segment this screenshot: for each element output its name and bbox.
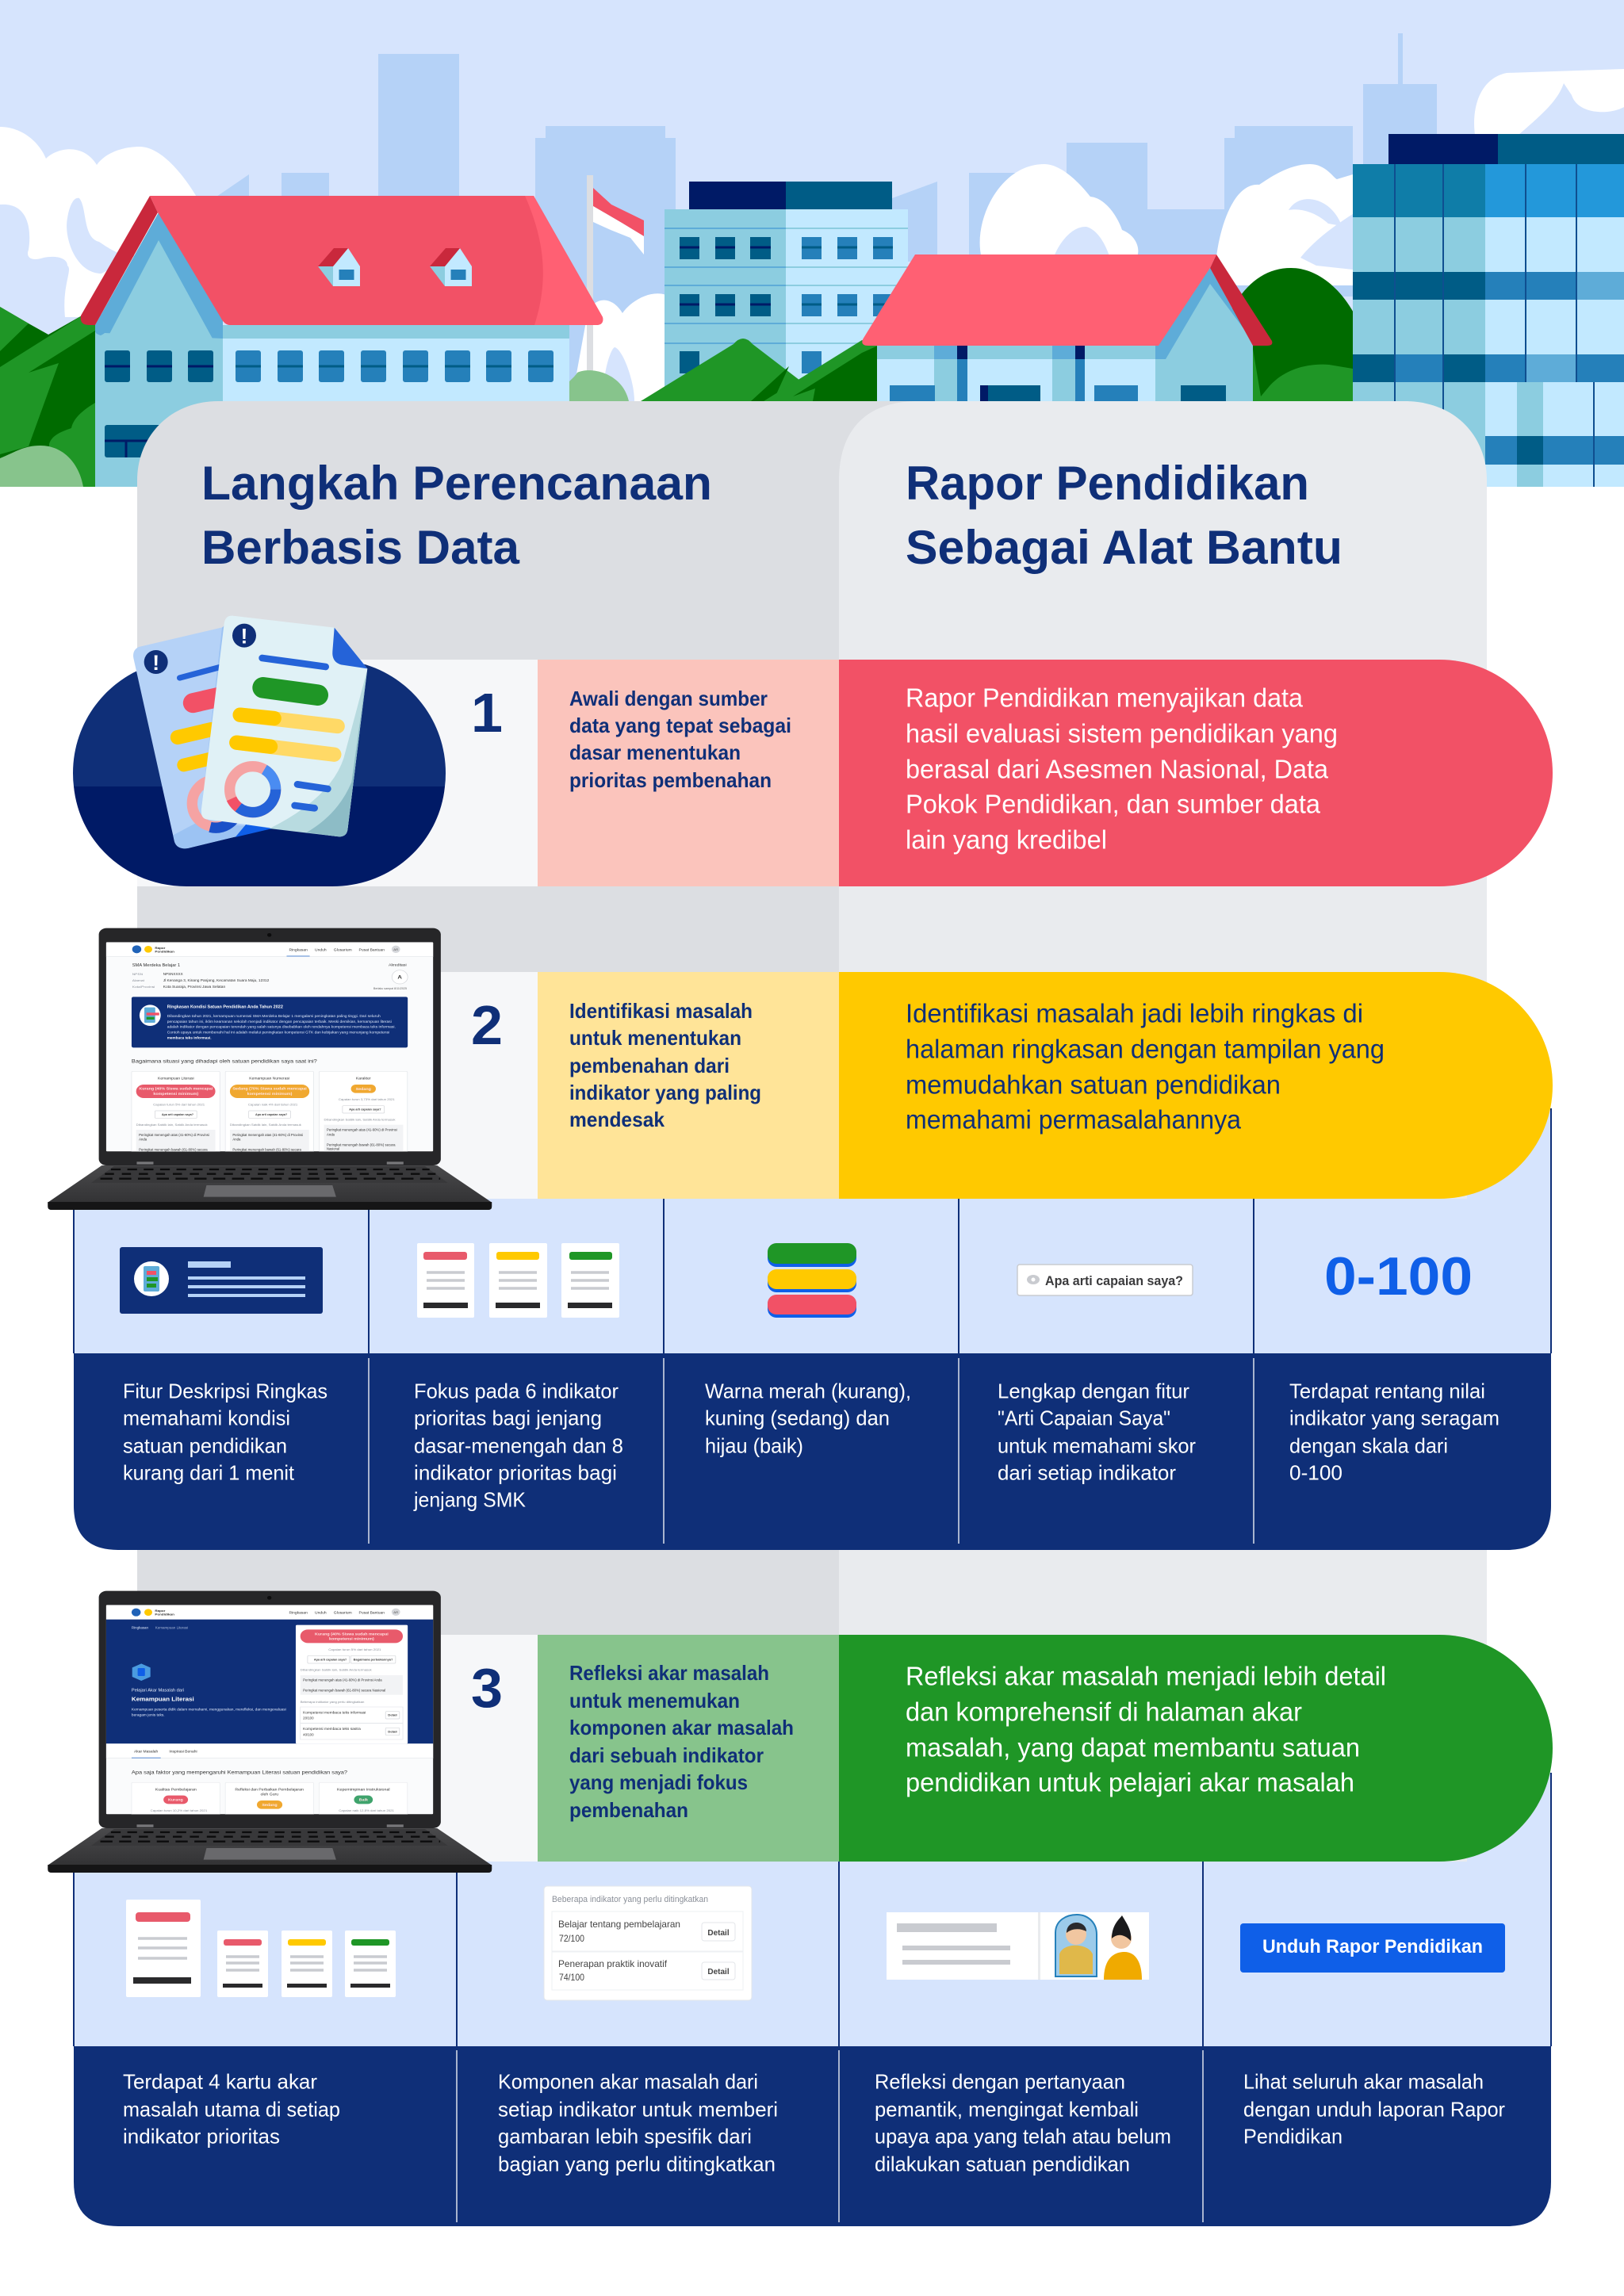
laptop: summary page: Kemampuan Literasi <box>158 1077 194 1081</box>
panel: main background columns <box>137 401 1487 2141</box>
button: download report: Unduh Rapor Pendidikan <box>1262 1936 1483 1957</box>
step 3 description: yang menjadi fokus <box>569 1770 748 1794</box>
icon: indicators table: Penerapan praktik inovatif <box>558 1958 668 1969</box>
laptop: summary page: Pusat Bantuan <box>359 948 385 951</box>
icon: indicators table: Detail <box>707 1929 730 1938</box>
step 3 description: komponen akar masalah <box>569 1716 794 1739</box>
laptop: summary page: Peringkat menengah atas (41-60%) di Provinsi <box>232 1133 303 1137</box>
laptop: root cause page: Ringkasan <box>132 1626 148 1629</box>
laptop: summary page: kompetensi minimum) <box>153 1092 199 1096</box>
heading: right column: Rapor Pendidikan <box>906 457 1309 510</box>
step 3 tool text: pendidikan untuk pelajari akar masalah <box>906 1768 1354 1797</box>
city scene background <box>0 0 1624 487</box>
column 3 text <box>705 1380 911 1457</box>
laptop: root cause page: Sedang <box>262 1803 278 1808</box>
laptop: summary page: Berlaku sampai 8/11/2025 <box>373 987 407 990</box>
column 3 text: hijau (baik) <box>705 1433 803 1457</box>
icon: documents on navy blob: ! <box>241 625 247 649</box>
step 1 description <box>569 687 791 792</box>
step 1 tool text: berasal dari Asesmen Nasional, Data <box>906 755 1329 783</box>
laptop: root cause page: Apa saja faktor yang mempengaruhi Kemampuan Literasi satuan pendidikan saya? <box>132 1770 347 1775</box>
step 1 tool text: lain yang kredibel <box>906 825 1107 855</box>
laptop: summary page: Rapor <box>155 946 166 950</box>
score range: 0-100 <box>1324 1246 1473 1307</box>
icon: indicators table: Beberapa indikator yang perlu ditingkatkan <box>552 1895 708 1904</box>
laptop: root cause page: Pelajari Akar Masalah dari <box>132 1689 184 1693</box>
step 3 description: pembenahan <box>569 1798 688 1822</box>
laptop: summary page: Dibandingkan tahun 2021, kemampuan numerasi SMA Merdeka Belajar 1 mengalami peningkatan paling tinggi. Dari seluruh <box>167 1014 381 1018</box>
laptop: root cause page: Baik <box>359 1798 368 1803</box>
laptop: root cause page: Akar Masalah <box>134 1750 159 1754</box>
laptop: summary page: Anda <box>139 1138 147 1141</box>
column 1 text: Terdapat 4 kartu akar <box>123 2069 317 2093</box>
heading: right column: Sebagai Alat Bantu <box>906 521 1342 574</box>
column 1 text: indikator prioritas <box>123 2125 280 2149</box>
laptop: summary page: Pendidikan <box>155 950 174 953</box>
windows row <box>105 350 553 457</box>
laptop: summary page: Akreditasi <box>389 963 407 966</box>
laptop: root cause page: Rapor <box>155 1609 166 1613</box>
laptop: root cause page: beragam jenis teks. <box>132 1713 165 1716</box>
laptop: root cause page: Kurang (40% Siswa sudah mencapai <box>315 1632 389 1636</box>
column 3 text: upaya apa yang telah atau belum <box>875 2125 1171 2149</box>
step 3 description <box>569 1661 794 1822</box>
laptop: root cause page: Beberapa indikator yang perlu ditingkatkan <box>301 1700 365 1704</box>
laptop: root cause page: Kepemimpinan Instruksional <box>337 1788 390 1791</box>
big tree right <box>1221 268 1356 401</box>
step 1 tool text <box>906 683 1338 855</box>
tall building center <box>665 182 908 408</box>
column 1 text: masalah utama di setiap <box>123 2098 340 2122</box>
laptop: root cause page: Peringkat menengah bawah (61-80%) secara Nasional <box>303 1689 385 1692</box>
step 2 description: mendesak <box>569 1108 665 1131</box>
step 3 band <box>137 1635 1553 1862</box>
laptop: root cause page: Ringkasan <box>289 1611 308 1614</box>
icon: three indicator cards <box>417 1243 619 1318</box>
laptop: summary page: Capaian turun 3,73% dari tahun 2021 <box>339 1097 395 1101</box>
laptop: summary page: Glosarium <box>334 948 352 951</box>
column 4 text <box>998 1380 1196 1484</box>
laptop: summary page: SMA Merdeka Belajar 1 <box>132 963 180 968</box>
column 2 text <box>413 1380 623 1511</box>
icon: color pills <box>768 1243 856 1318</box>
laptop: summary page: Sedang (70% Siswa sudah mencapai <box>232 1087 307 1092</box>
column 3 text: kuning (sedang) dan <box>705 1406 890 1430</box>
column 4 text: Lengkap dengan fitur <box>998 1380 1189 1403</box>
step 2 tool text <box>906 999 1385 1134</box>
heading: left column: Berbasis Data <box>201 521 520 574</box>
laptop: summary page: kompetensi minimum) <box>247 1092 293 1096</box>
icon: four root-cause cards <box>126 1900 396 1997</box>
step 2 description: untuk menentukan <box>569 1026 741 1050</box>
step 3 description: dari sebuah indikator <box>569 1743 764 1767</box>
step 3 tool text <box>906 1662 1386 1797</box>
column 5 text: indikator yang seragam <box>1289 1406 1500 1430</box>
heading: left column: Langkah Perencanaan <box>201 457 712 510</box>
step 2 description: pembenahan dari <box>569 1054 730 1077</box>
step 2 description: Identifikasi masalah <box>569 999 753 1023</box>
column 4 text: Lihat seluruh akar masalah <box>1243 2069 1484 2093</box>
step 2 band <box>137 972 1553 1199</box>
laptop: summary page: Anda <box>327 1133 335 1136</box>
column 1 text: Fitur Deskripsi Ringkas <box>123 1380 327 1403</box>
number 1: 1 <box>471 682 503 744</box>
laptop: root cause page: Peringkat menengah atas (41-60%) di Provinsi Anda <box>303 1678 382 1682</box>
step 1 tool text: hasil evaluasi sistem pendidikan yang <box>906 718 1338 748</box>
step 1 tool text: Pokok Pendidikan, dan sumber data <box>906 790 1321 818</box>
column 3 text: pemantik, mengingat kembali <box>875 2098 1139 2122</box>
laptop: root cause page: Pendidikan <box>155 1613 174 1616</box>
flag <box>558 175 644 401</box>
icon: indicators table: Detail <box>707 1968 730 1976</box>
laptop: summary page: Apa arti capaian saya? <box>255 1112 288 1116</box>
column 4 text: dengan unduh laporan Rapor <box>1243 2098 1505 2122</box>
trees center <box>641 339 878 401</box>
laptop: summary page: Kurang (40% Siswa sudah mencapai <box>139 1087 213 1092</box>
step 2 description <box>569 999 761 1131</box>
laptop: summary page: Capaian naik 4% dari tahun 2021 <box>248 1103 298 1106</box>
laptop: summary page: Kota Suaraja, Provinsi Jawa Selatan <box>163 985 226 989</box>
laptop: summary page: Contoh upaya untuk membenahi hal ini adalah melalui peningkatan kompetensi GTK dan kebijakan yang menunjang kompetensi <box>167 1031 389 1035</box>
laptop: root cause page: kompetensi minimum) <box>329 1637 374 1642</box>
laptop: root cause page: Kompetensi membaca teks informasi <box>303 1711 366 1714</box>
laptop: summary page: adalah indikator dengan pencapaian terendah yang salah satunya disebabkan oleh rendahnya kompetensi membaca teks informasi. <box>167 1025 396 1029</box>
laptop: summary page: Kota/Provinsi <box>132 985 155 989</box>
step 3 tool text: masalah, yang dapat membantu satuan <box>906 1733 1360 1762</box>
laptop: summary page: Sedang <box>356 1087 371 1092</box>
step 2 tool text: Identifikasi masalah jadi lebih ringkas di <box>906 999 1363 1027</box>
school building left <box>81 196 603 487</box>
laptop: summary page: Peringkat menengah bawah (61-80%) secara <box>139 1148 208 1151</box>
column 1 text: memahami kondisi <box>123 1406 290 1430</box>
icon: documents on navy blob: ! <box>152 651 159 675</box>
laptop: root cause page: 40/100 <box>303 1733 314 1736</box>
heading: left column <box>201 457 712 574</box>
school building right <box>862 254 1272 403</box>
laptop: summary page: Bagaimana situasi yang dihadapi oleh satuan pendidikan saya saat ini? <box>132 1058 317 1064</box>
column 4 text <box>1243 2069 1505 2149</box>
column 3 text: Refleksi dengan pertanyaan <box>875 2069 1125 2093</box>
step 1 description: dasar menentukan <box>569 740 741 764</box>
laptop: root cause page: Detail <box>388 1713 397 1717</box>
column 2 text: setiap indikator untuk memberi <box>498 2098 778 2122</box>
column 2 text: dasar-menengah dan 8 <box>414 1433 623 1457</box>
laptop: root cause page: Kurang <box>168 1798 183 1803</box>
column 2 text <box>498 2069 778 2175</box>
icon: documents on navy blob <box>73 616 446 886</box>
laptop: summary page: NPSNXXXX <box>163 972 183 976</box>
laptop: root cause page: Capaian turun 5% dari tahun 2021 <box>328 1647 381 1651</box>
laptop: root cause page: Kemampuan peserta didik dalam memahami, menggunakan, merefleksi, dan mengevaluasi <box>132 1708 286 1711</box>
icon: achievement button <box>1017 1265 1193 1295</box>
laptop: root cause page: Detail <box>388 1730 397 1733</box>
laptop: root cause page: Kemampuan Literasi <box>132 1696 194 1702</box>
column 2 text: prioritas bagi jenjang <box>414 1406 602 1430</box>
button: download report <box>1240 1923 1505 1973</box>
step 2 tool text: memudahkan satuan pendidikan <box>906 1070 1281 1099</box>
laptop: summary page: Alamat <box>132 978 145 982</box>
laptop: summary page: Peringkat menengah atas (41-60%) di Provinsi <box>139 1133 209 1137</box>
step 3 tool text: Refleksi akar masalah menjadi lebih detail <box>906 1662 1386 1690</box>
laptop: root cause page: Kompetensi membaca teks sastra <box>303 1727 361 1731</box>
laptop: root cause page: Dibandingkan Satdik lain, Satdik Anda termasuk <box>301 1668 372 1672</box>
laptop: summary page: Ringkasan <box>289 948 308 951</box>
column 2 text: bagian yang perlu ditingkatkan <box>498 2152 776 2175</box>
column 4 text: untuk memahami skor <box>998 1433 1196 1457</box>
number 2: 2 <box>471 994 503 1056</box>
column 1 text <box>123 2069 340 2149</box>
laptop: summary page: Apa arti capaian saya? <box>349 1108 381 1112</box>
heading: right column <box>906 457 1342 574</box>
laptop: root cause page: Pusat Bantuan <box>359 1611 385 1614</box>
icon: indicators table: Belajar tentang pembelajaran <box>558 1919 680 1930</box>
laptop: root cause page: Unduh <box>315 1611 327 1614</box>
step 2 feature card <box>74 1108 1551 1550</box>
laptop: summary page: Dibandingkan Satdik lain, Satdik Anda termasuk <box>230 1123 302 1127</box>
dormer windows <box>318 248 472 286</box>
icon: reflection question with mirror <box>887 1912 1149 1980</box>
column 1 text: kurang dari 1 menit <box>123 1460 295 1484</box>
laptop: root cause page: Capaian naik 12,8% dari tahun 2021 <box>339 1808 395 1812</box>
column 5 text: 0-100 <box>1289 1460 1342 1484</box>
column 2 text: indikator prioritas bagi <box>414 1460 617 1484</box>
laptop: summary page: Ringkasan Kondisi Satuan Pendidikan Anda Tahun 2022 <box>167 1005 283 1010</box>
laptop: summary page: Nasional <box>327 1147 339 1151</box>
column 4 text: "Arti Capaian Saya" <box>998 1406 1170 1430</box>
laptop: summary page: Peringkat menengah bawah (61-80%) secara <box>327 1143 396 1146</box>
column 3 text: dilakukan satuan pendidikan <box>875 2152 1130 2175</box>
laptop: summary page: A <box>397 974 402 981</box>
column 3 text <box>875 2069 1171 2175</box>
laptop: root cause page: oleh Guru <box>261 1793 279 1797</box>
trees left <box>0 307 95 487</box>
laptop: root cause page: Inspirasi Benahi <box>169 1750 197 1754</box>
step 3 feature card <box>74 1773 1551 2226</box>
column 1 text: satuan pendidikan <box>123 1433 287 1457</box>
column 2 text: Komponen akar masalah dari <box>498 2069 758 2093</box>
laptop: summary page: Apa arti capaian saya? <box>162 1112 194 1116</box>
laptop: summary page: AR <box>393 947 398 951</box>
laptop: root cause page: Bagaimana perbaikannya? <box>354 1658 393 1662</box>
column 2 text: Fokus pada 6 indikator <box>414 1380 619 1403</box>
laptop: root cause page: Refleksi dan Perbaikan Pembelajaran <box>235 1788 304 1791</box>
column 4 text: Pendidikan <box>1243 2125 1342 2149</box>
laptop: summary page: NPSN <box>132 972 143 976</box>
laptop: summary page: Jl Kenanga 3, Kinang Panjang, Kecamatan Suara Maju, 12312 <box>163 978 270 982</box>
column 2 text: jenjang SMK <box>413 1487 527 1511</box>
step 2 tool text: memahami permasalahannya <box>906 1105 1242 1134</box>
column 5 text <box>1289 1380 1500 1484</box>
laptop: summary page: membaca teks informasi. <box>167 1036 212 1040</box>
laptop: summary page: Peringkat menengah atas (41-60%) di Provinsi <box>327 1128 397 1132</box>
icon: indicators table: 74/100 <box>559 1972 584 1983</box>
icon: indicators table: 72/100 <box>559 1933 584 1944</box>
laptop: root cause page: Glosarium <box>334 1611 352 1614</box>
number 3: 3 <box>471 1657 503 1719</box>
column 4 text: dari setiap indikator <box>998 1460 1176 1484</box>
laptop: summary page: Dibandingkan Satdik lain, Satdik Anda termasuk <box>136 1123 208 1127</box>
column 5 text: Terdapat rentang nilai <box>1289 1380 1485 1403</box>
laptop: root cause page: Capaian turun 10,2% dari tahun 2021 <box>151 1808 208 1812</box>
glass tower right <box>1353 134 1624 487</box>
laptop: summary page: Capaian turun 5% dari tahun 2021 <box>153 1103 205 1106</box>
column 5 text: dengan skala dari <box>1289 1433 1448 1457</box>
column 1 text <box>123 1380 327 1484</box>
step 1 description: Awali dengan sumber <box>569 687 768 710</box>
laptop: summary page: Anda <box>232 1138 241 1141</box>
step 1 band <box>137 660 1553 886</box>
laptop: summary page: Dibandingkan Satdik lain, Satdik Anda termasuk <box>324 1118 396 1122</box>
laptop: summary page: Peringkat menengah bawah (61-80%) secara <box>232 1148 301 1151</box>
step 2 tool text: halaman ringkasan dengan tampilan yang <box>906 1034 1385 1064</box>
icon: indicators table <box>544 1886 752 2000</box>
step 3 description: untuk menemukan <box>569 1689 740 1712</box>
column 3 text: Warna merah (kurang), <box>705 1380 911 1403</box>
skyline buildings <box>216 33 1437 408</box>
laptop: summary page: Unduh <box>315 948 327 951</box>
column 2 text: gambaran lebih spesifik dari <box>498 2125 752 2149</box>
icon: achievement button: Apa arti capaian saya? <box>1045 1273 1183 1288</box>
laptop: summary page: Kemampuan Numerasi <box>249 1077 289 1081</box>
laptop: root cause page: Kemampuan Literasi <box>155 1626 188 1629</box>
step 2 description: indikator yang paling <box>569 1081 761 1104</box>
step 3 description: Refleksi akar masalah <box>569 1661 769 1685</box>
laptop: summary page: Karakter <box>356 1077 371 1081</box>
step 1 tool text: Rapor Pendidikan menyajikan data <box>906 683 1304 712</box>
laptop: summary page <box>48 928 492 1210</box>
laptop: root cause page: 20/100 <box>303 1716 314 1720</box>
laptop: root cause page <box>48 1591 492 1873</box>
laptop: root cause page: AR <box>393 1610 398 1614</box>
laptop: summary page: pencapaian tahun ini, iklim keamanan sekolah menjadi indikator dengan pencapaian terbaik. Meski demikian, kemampuan literasi <box>167 1020 392 1024</box>
laptop: root cause page: Apa arti capaian saya? <box>314 1658 347 1662</box>
icon: summary card <box>120 1247 323 1314</box>
step 1 description: prioritas pembenahan <box>569 768 772 792</box>
step 3 tool text: dan komprehensif di halaman akar <box>906 1697 1302 1727</box>
step 1 description: data yang tepat sebagai <box>569 714 791 737</box>
laptop: root cause page: Kualitas Pembelajaran <box>155 1788 197 1791</box>
clouds <box>0 69 1624 404</box>
